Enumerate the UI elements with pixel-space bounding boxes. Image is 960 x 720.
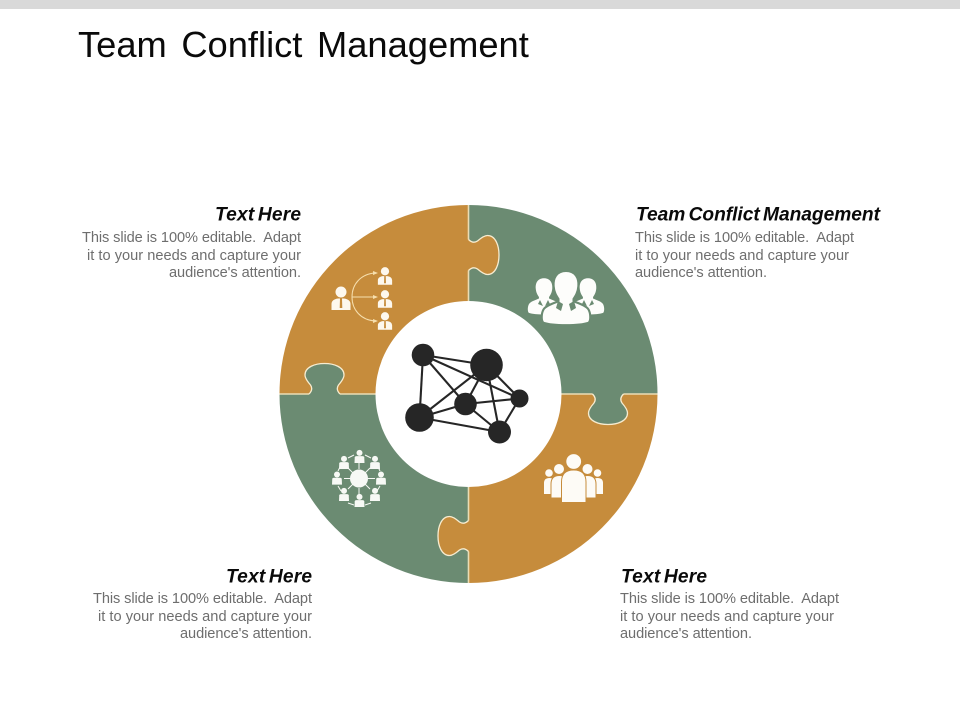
body: audience's attention. [169, 265, 301, 281]
panel: top-left orange piece [280, 205, 468, 394]
body: audience's attention. [180, 626, 312, 642]
icon: people around a central hub [332, 450, 386, 507]
body: This slide is 100% editable. Adapt [82, 230, 301, 246]
icon: leader delegating to three people [332, 267, 392, 330]
text block: bottom left [93, 567, 312, 642]
icon: group of five people [544, 454, 603, 502]
puzzle ring [280, 205, 658, 583]
icon: network diagram [405, 344, 528, 444]
body: it to your needs and capture your [620, 609, 834, 625]
text block: top right [635, 205, 882, 281]
body: This slide is 100% editable. Adapt [635, 230, 854, 246]
body: it to your needs and capture your [87, 248, 301, 264]
panel: bottom-right orange piece [468, 394, 658, 583]
title: Team Conflict Management [78, 24, 529, 65]
body [635, 230, 854, 281]
heading: Team Conflict Management [636, 205, 882, 226]
body: This slide is 100% editable. Adapt [620, 591, 839, 607]
heading: Text Here [621, 567, 707, 588]
body [93, 591, 312, 642]
panel: bottom-left green piece [280, 394, 468, 583]
text block: bottom right [620, 567, 839, 642]
body [82, 230, 301, 281]
text block: top left [82, 205, 301, 281]
body: audience's attention. [635, 265, 767, 281]
heading: Text Here [215, 205, 301, 226]
body: audience's attention. [620, 626, 752, 642]
seams between pieces [280, 205, 658, 583]
heading: Text Here [226, 567, 312, 588]
panel: top-right green piece [468, 205, 658, 394]
puzzle tab: green into orange, right [588, 394, 628, 424]
body: it to your needs and capture your [635, 248, 849, 264]
puzzle tab: orange into green, bottom [438, 516, 468, 556]
icon: three business people [528, 271, 604, 325]
body [620, 591, 839, 642]
body: This slide is 100% editable. Adapt [93, 591, 312, 607]
body: it to your needs and capture your [98, 609, 312, 625]
top grey bar [0, 0, 960, 9]
puzzle tab: green into orange, left [305, 364, 344, 394]
puzzle tab: orange into green, top [468, 236, 499, 274]
